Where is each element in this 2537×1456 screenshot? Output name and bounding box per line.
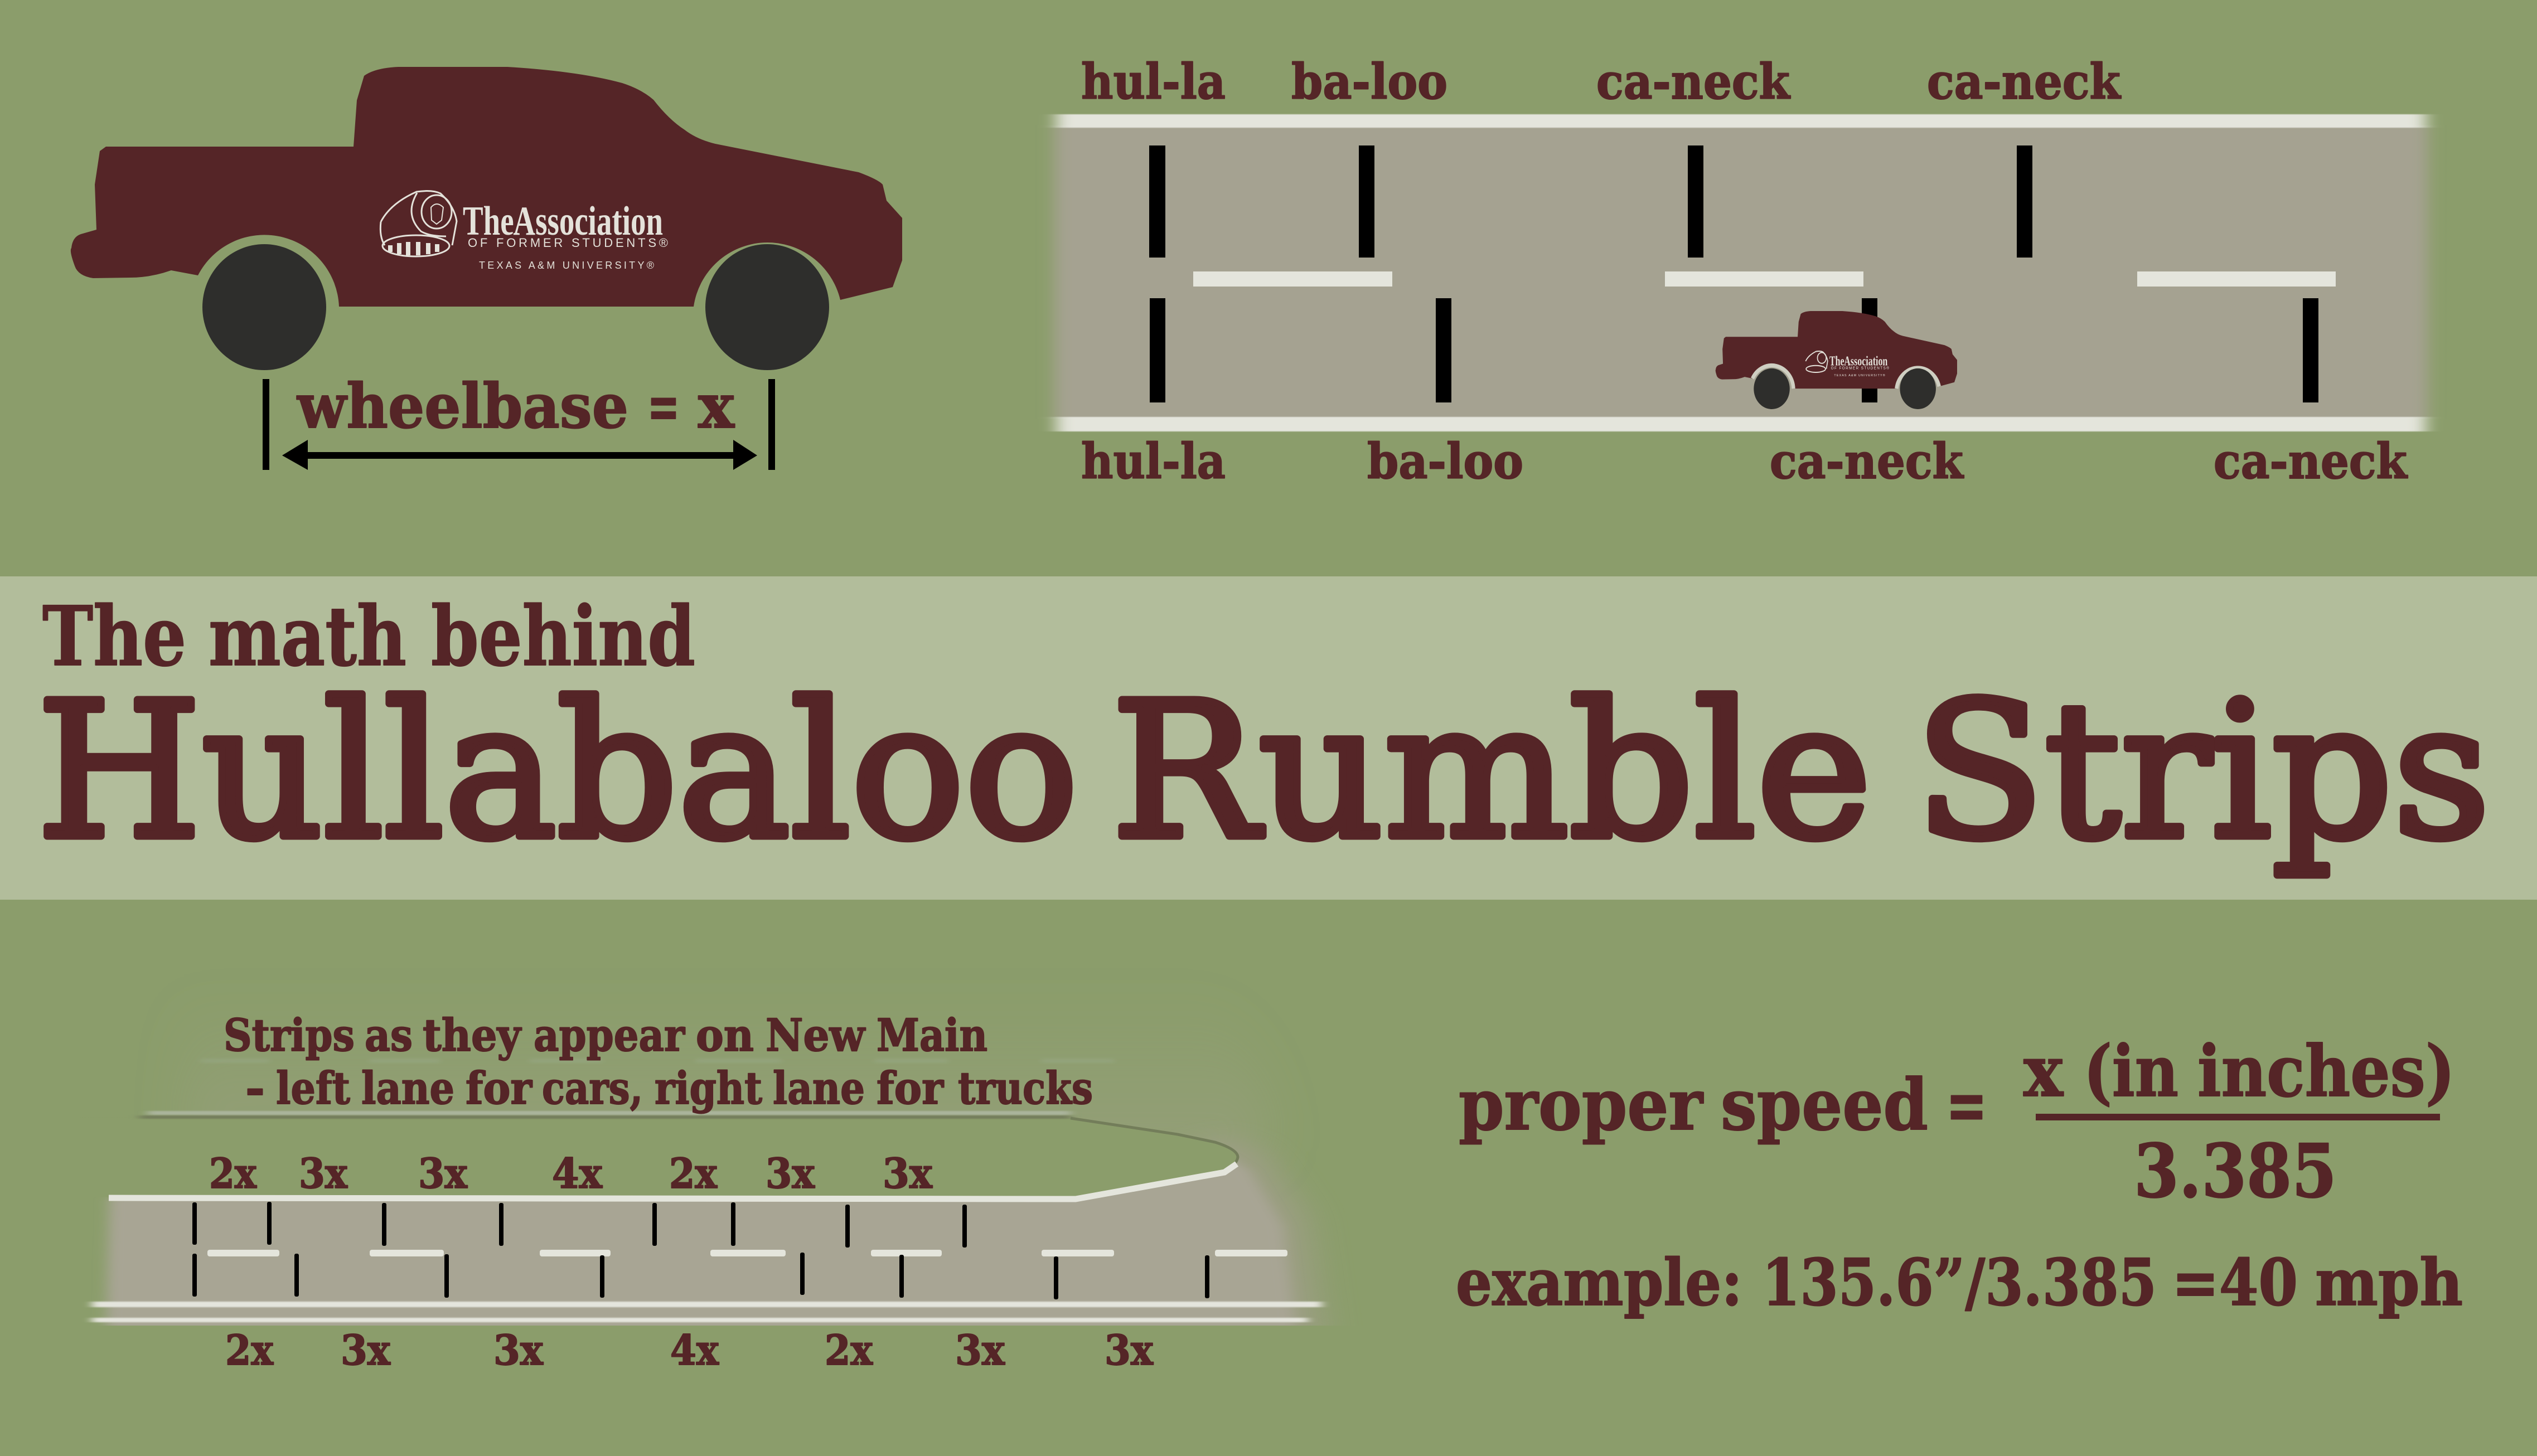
lower road surface <box>101 1163 1296 1326</box>
left-lane strips on New Main <box>192 1202 967 1248</box>
small truck on road: OF FORMER STUDENTS® <box>1831 366 1889 371</box>
top spacing labels: 3x <box>418 1150 468 1198</box>
top syllable labels: ca-neck <box>1927 53 2122 110</box>
main title: Hullabaloo <box>37 663 1078 881</box>
panel caption: on <box>696 1009 754 1061</box>
wheelbase label: = <box>647 370 680 442</box>
top syllable labels: hul-la <box>1081 53 1226 110</box>
numerator <box>2023 1030 2455 1113</box>
worked example: example: <box>1456 1245 1742 1321</box>
bottom spacing labels: 3x <box>493 1327 544 1375</box>
New Main road photo panel <box>56 998 1324 1375</box>
truck side view with wheelbase <box>71 67 902 370</box>
logo wordmark: The Association <box>463 198 663 244</box>
worked example <box>1456 1245 2463 1321</box>
bottom spacing labels: 2x <box>825 1327 873 1375</box>
panel caption: New <box>766 1009 866 1061</box>
formula left side: proper <box>1459 1064 1703 1146</box>
panel caption: right <box>655 1062 762 1114</box>
bottom spacing labels: 3x <box>1105 1327 1154 1375</box>
formula left side <box>1459 1064 1987 1146</box>
top spacing labels: 3x <box>883 1150 933 1198</box>
logo: The Association of Former Students <box>380 191 668 271</box>
fraction bar <box>2036 1114 2440 1120</box>
road edge lines <box>92 1302 1321 1322</box>
top spacing labels: 2x <box>669 1150 718 1198</box>
worked example: mph <box>2315 1245 2463 1321</box>
wheelbase dimension marker <box>263 370 775 470</box>
top spacing labels: 3x <box>766 1150 815 1198</box>
logo: The Association of Former Students: OF FORMER STUDENTS® <box>468 236 668 250</box>
panel caption: Main <box>877 1009 987 1061</box>
panel caption: left <box>276 1062 350 1114</box>
right-lane strips on New Main <box>192 1253 1209 1299</box>
wheelbase label: x <box>698 370 735 442</box>
bottom syllable labels: ca-neck <box>1770 433 1964 490</box>
small truck on road: TEXAS A&M UNIVERSITY® <box>1834 373 1885 377</box>
lower road outer fade <box>1220 1142 1329 1326</box>
bottom syllable labels: ba-loo <box>1367 433 1523 490</box>
subtitle: The <box>42 588 186 685</box>
formula left side: speed <box>1721 1064 1928 1146</box>
left-lane rumble strips <box>1149 145 2032 258</box>
icon: Aggie ring <box>380 191 457 256</box>
subtitle <box>42 588 695 685</box>
lane dashes on New Main <box>207 1250 1287 1256</box>
bottom syllable labels <box>1081 433 2408 490</box>
panel caption: - <box>245 1062 265 1114</box>
panel caption: as <box>365 1009 413 1061</box>
dimension ticks <box>263 379 775 470</box>
subtitle: math <box>209 588 406 685</box>
panel caption: trucks <box>958 1062 1093 1114</box>
banner background <box>0 576 2537 900</box>
road diagram with strip spacing <box>1054 53 2428 490</box>
panel caption: cars, <box>542 1062 643 1114</box>
double-headed arrow <box>282 440 757 470</box>
bottom spacing labels: 4x <box>670 1327 719 1375</box>
title banner <box>0 576 2537 900</box>
top spacing labels: 2x <box>209 1150 257 1198</box>
subtitle: behind <box>431 588 695 685</box>
numerator: (in <box>2084 1030 2178 1113</box>
faded upper road <box>184 998 1271 1193</box>
main title: Rumble <box>1111 663 1872 881</box>
bottom syllable labels: hul-la <box>1081 433 1226 490</box>
front and rear wheels <box>202 244 829 370</box>
main title: Strips <box>1915 663 2490 881</box>
top syllable labels: ca-neck <box>1596 53 1791 110</box>
denominator: 3.385 <box>2134 1128 2337 1215</box>
panel caption: appear <box>534 1009 685 1061</box>
road surface <box>1054 114 2428 431</box>
worked example: =40 <box>2172 1245 2298 1321</box>
right-lane rumble strips <box>1150 298 2318 402</box>
bottom spacing labels <box>225 1327 1154 1375</box>
small truck on road <box>1716 311 1957 409</box>
small truck on road: The Association <box>1829 353 1888 368</box>
panel caption: lane <box>361 1062 454 1114</box>
panel caption: for <box>466 1062 532 1114</box>
top spacing labels: 3x <box>299 1150 348 1198</box>
lane dashes <box>1193 271 2336 287</box>
numerator: x <box>2023 1030 2064 1113</box>
bottom syllable labels: ca-neck <box>2214 433 2408 490</box>
panel caption: for <box>877 1062 944 1114</box>
top syllable labels <box>1081 53 2122 110</box>
panel caption: they <box>423 1009 522 1061</box>
upper road edge lines <box>139 1111 1071 1119</box>
bottom spacing labels: 3x <box>955 1327 1005 1375</box>
main title <box>37 663 2490 881</box>
top syllable labels: ba-loo <box>1291 53 1447 110</box>
top spacing labels: 4x <box>552 1150 603 1198</box>
panel caption <box>224 1009 1093 1114</box>
faint upper-road dashes <box>201 1059 1114 1063</box>
wheelbase label: wheelbase <box>297 370 628 442</box>
grass median <box>56 1117 1238 1197</box>
top spacing labels <box>209 1150 933 1198</box>
speed formula <box>1456 1030 2463 1321</box>
logo: The Association of Former Students: TEXAS A&M UNIVERSITY® <box>479 260 654 271</box>
median curb lines <box>109 1118 1238 1199</box>
bottom spacing labels: 2x <box>225 1327 274 1375</box>
truck body <box>71 67 902 307</box>
formula left side: = <box>1946 1064 1987 1146</box>
bottom spacing labels: 3x <box>341 1327 391 1375</box>
worked example: 135.6”/3.385 <box>1762 1245 2157 1321</box>
panel caption: lane <box>773 1062 865 1114</box>
panel caption: Strips <box>224 1009 355 1061</box>
numerator: inches) <box>2197 1030 2455 1113</box>
